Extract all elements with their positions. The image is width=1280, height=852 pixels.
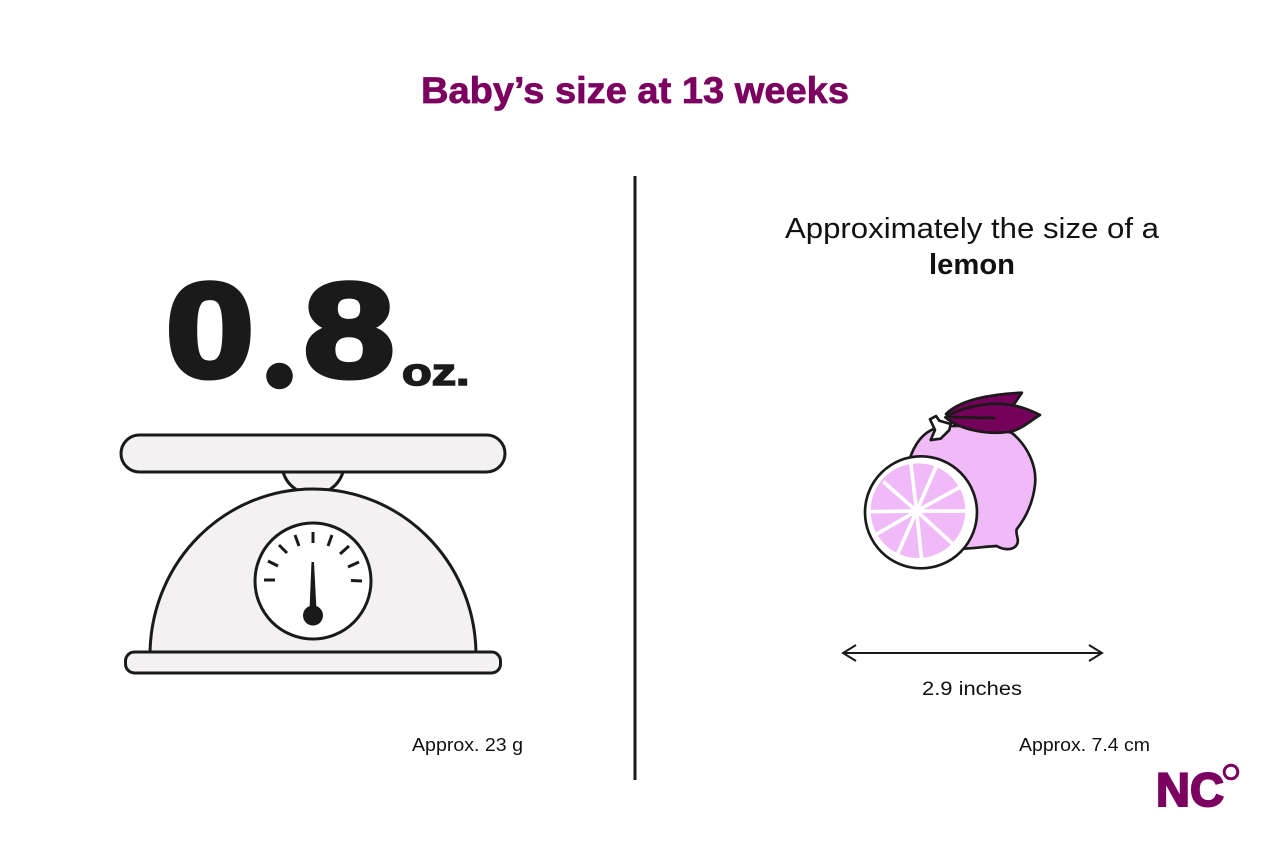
title: Baby’s size at 13 weeks — [421, 70, 849, 111]
weight value — [166, 255, 470, 406]
scale neck — [283, 472, 343, 490]
divider — [634, 176, 636, 780]
comparison text: lemon — [929, 249, 1015, 281]
logo: NC — [1156, 763, 1224, 816]
size label: 2.9 inches — [922, 678, 1022, 700]
comparison text: Approximately the size of a — [785, 213, 1160, 245]
weight caption: Approx. 23 g — [412, 735, 523, 755]
length caption: Approx. 7.4 cm — [1019, 735, 1150, 755]
needle — [310, 562, 316, 610]
weight value: . — [272, 327, 289, 394]
weight value: 0 — [166, 256, 254, 406]
comparison text — [785, 213, 1160, 281]
lemon stem — [930, 416, 951, 440]
scale dial — [255, 523, 371, 639]
lemon slice — [865, 456, 977, 568]
leaf midrib — [948, 413, 995, 422]
scale top plate — [121, 435, 505, 472]
weight value: oz. — [402, 351, 470, 394]
leaf front — [945, 404, 1040, 433]
size arrow — [843, 645, 1102, 661]
leaf back — [946, 393, 1022, 414]
scale dome — [150, 489, 476, 652]
scale base — [126, 652, 500, 673]
icon: lemon — [865, 393, 1040, 568]
icon: kitchen scale — [121, 435, 505, 673]
lemon body — [909, 426, 1035, 549]
weight value: 8 — [304, 255, 394, 405]
